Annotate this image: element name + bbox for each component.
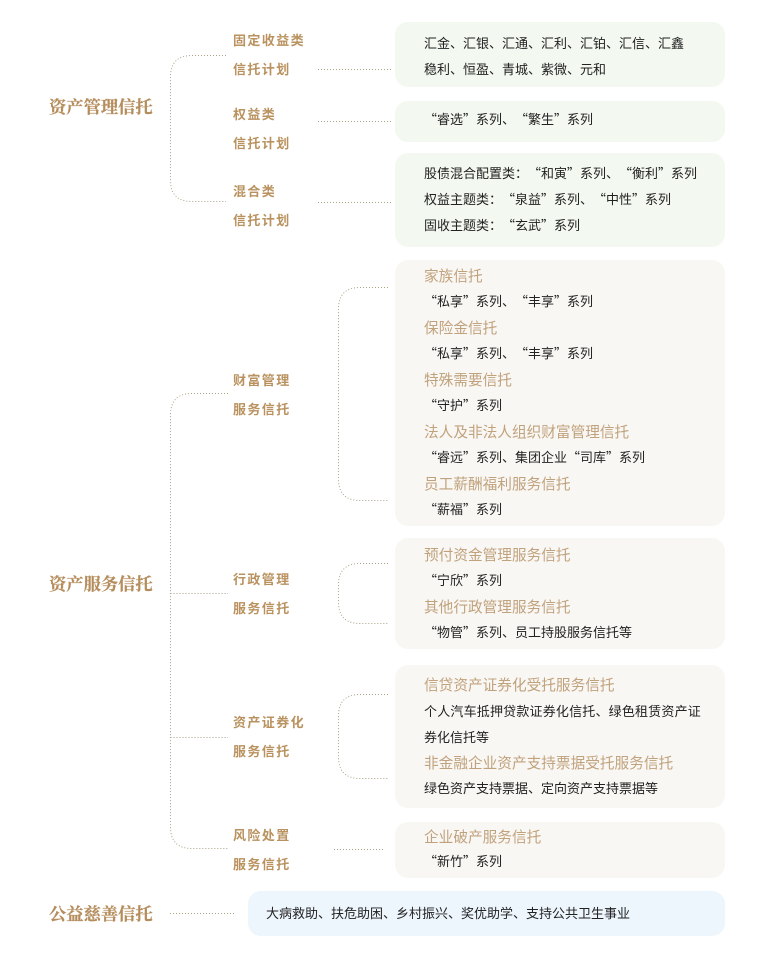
label: 权益类信托计划: 权益类 — [233, 104, 276, 123]
text: 财富管理系列: 特殊需要信托 — [424, 369, 512, 390]
label: 权益类信托计划 — [233, 104, 291, 152]
text: 固定收益类系列: 汇金、汇银、汇通、汇利、汇铂、汇信、汇鑫 — [424, 33, 684, 52]
label: 财富管理服务信托: 财富管理 — [233, 370, 291, 389]
text: 财富管理系列: 法人及非法人组织财富管理信托 — [424, 421, 629, 442]
text: 财富管理系列: “私享”系列、“丰享”系列 — [424, 291, 593, 310]
panel: 资产证券化服务信托产品 — [395, 665, 725, 808]
label: 财富管理服务信托: 服务信托 — [233, 399, 291, 418]
label: 行政管理服务信托: 服务信托 — [233, 598, 291, 617]
text: 财富管理系列: “薪福”系列 — [424, 499, 502, 518]
label: 权益类信托计划: 信托计划 — [233, 133, 291, 152]
text: 风险处置系列: “新竹”系列 — [424, 851, 502, 870]
text: 混合类系列: 固收主题类：“玄武”系列 — [424, 215, 580, 234]
text: 财富管理系列: 家族信托 — [424, 265, 483, 286]
text: 财富管理系列: “私享”系列、“丰享”系列 — [424, 343, 593, 362]
panel: 公益慈善信托内容 — [248, 891, 725, 936]
text: 行政管理系列 — [424, 544, 632, 641]
text: 行政管理系列: 其他行政管理服务信托 — [424, 596, 571, 617]
text: 混合类系列: 股债混合配置类：“和寅”系列、“衡利”系列 — [424, 163, 697, 182]
label: 行政管理服务信托 — [233, 569, 291, 617]
label: 固定收益类信托计划: 信托计划 — [233, 59, 291, 78]
label: 混合类信托计划 — [233, 181, 291, 229]
label: 固定收益类信托计划 — [233, 30, 305, 78]
text: 行政管理系列: “宁欣”系列 — [424, 570, 502, 589]
label: 资产证券化服务信托: 资产证券化 — [233, 712, 305, 731]
panel: 风险处置服务信托产品 — [395, 822, 725, 878]
text: 风险处置系列: 企业破产服务信托 — [424, 826, 541, 847]
text: 资产证券化系列: 信贷资产证券化受托服务信托 — [424, 674, 615, 695]
text: 睿选、繁生系列: “睿选”系列、“繁生”系列 — [424, 109, 593, 128]
text: 资产证券化系列: 非金融企业资产支持票据受托服务信托 — [424, 752, 673, 773]
text: 资产证券化系列 — [424, 674, 701, 797]
text: 风险处置系列 — [424, 826, 541, 870]
panel: 权益类产品 — [395, 101, 725, 142]
label: 混合类信托计划: 信托计划 — [233, 210, 291, 229]
text: 混合类系列 — [424, 163, 697, 234]
text: 固定收益类系列 — [424, 33, 684, 78]
text: 固定收益类系列: 稳利、恒盈、青城、紫微、元和 — [424, 59, 606, 78]
text: 资产证券化系列: 绿色资产支持票据、定向资产支持票据等 — [424, 778, 658, 797]
heading: 资产管理信托: 资产管理信托 — [49, 93, 153, 118]
text: 财富管理系列: “睿远”系列、集团企业“司库”系列 — [424, 447, 645, 466]
text: 财富管理系列 — [424, 265, 645, 518]
label: 风险处置服务信托: 服务信托 — [233, 854, 291, 873]
panel: 财富管理服务信托产品 — [395, 260, 725, 526]
label: 行政管理服务信托: 行政管理 — [233, 569, 291, 588]
text: 财富管理系列: “守护”系列 — [424, 395, 502, 414]
panel: 固定收益类产品 — [395, 22, 725, 87]
label: 风险处置服务信托: 风险处置 — [233, 825, 291, 844]
label: 资产证券化服务信托 — [233, 712, 305, 760]
text: 混合类系列: 权益主题类：“泉益”系列、“中性”系列 — [424, 189, 671, 208]
label: 资产证券化服务信托: 服务信托 — [233, 741, 291, 760]
text: 财富管理系列: 保险金信托 — [424, 317, 497, 338]
panel: 行政管理服务信托产品 — [395, 538, 725, 649]
text: 行政管理系列: 预付资金管理服务信托 — [424, 544, 571, 565]
label: 固定收益类信托计划: 固定收益类 — [233, 30, 305, 49]
text: 资产证券化系列: 个人汽车抵押贷款证券化信托、绿色租赁资产证 — [424, 701, 701, 720]
panel: 混合类产品 — [395, 153, 725, 247]
label: 风险处置服务信托 — [233, 825, 291, 873]
text: 行政管理系列: “物管”系列、员工持股服务信托等 — [424, 622, 632, 641]
text: 公益慈善领域: 大病救助、扶危助困、乡村振兴、奖优助学、支持公共卫生事业 — [266, 903, 630, 922]
text: 财富管理系列: 员工薪酬福利服务信托 — [424, 473, 571, 494]
label: 财富管理服务信托 — [233, 370, 291, 418]
label: 混合类信托计划: 混合类 — [233, 181, 276, 200]
heading: 公益慈善信托: 公益慈善信托 — [49, 900, 153, 925]
heading: 资产服务信托: 资产服务信托 — [49, 570, 153, 595]
text: 资产证券化系列: 券化信托等 — [424, 727, 489, 746]
